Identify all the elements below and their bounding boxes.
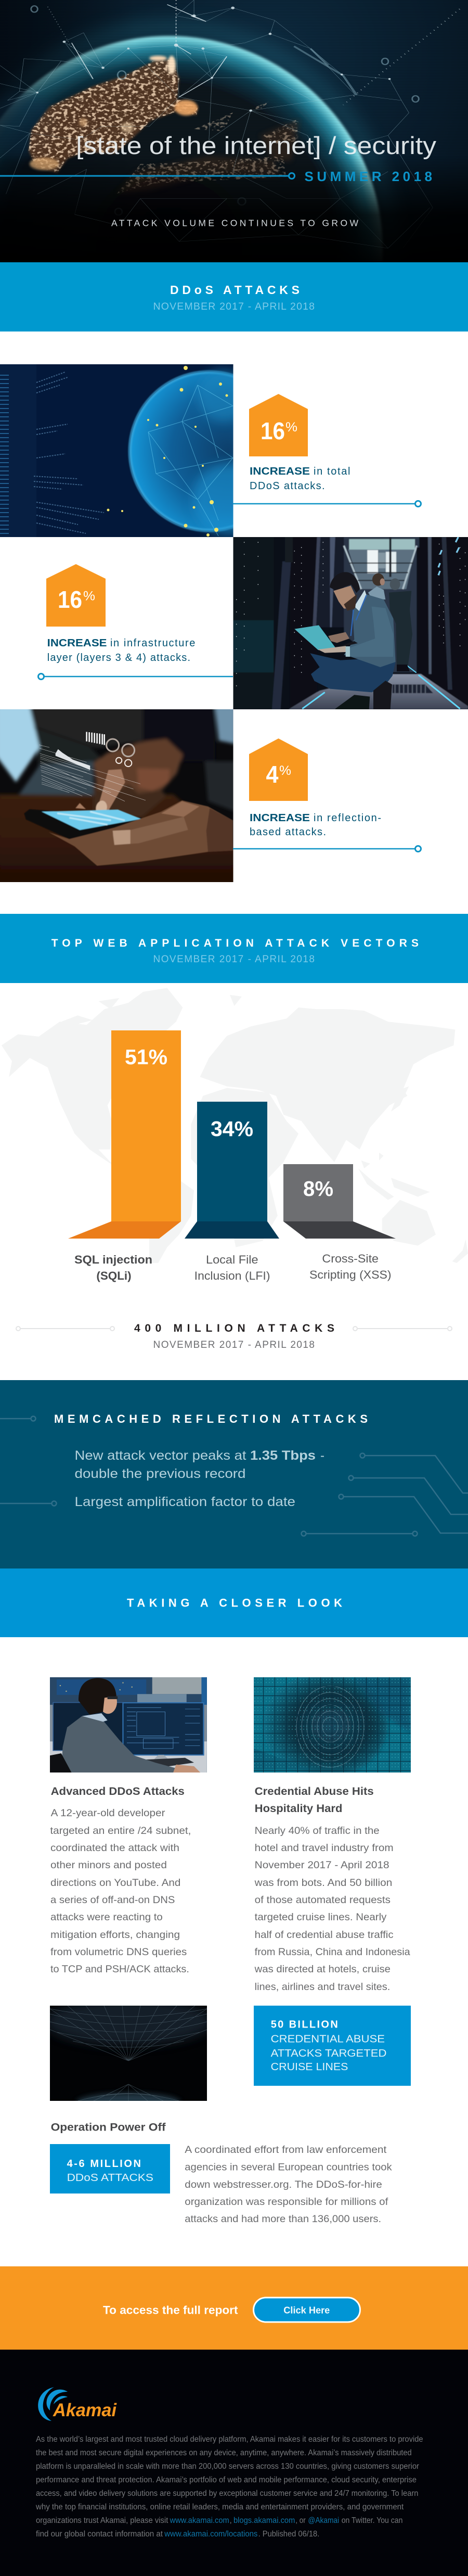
key points: 1.35 Tbps: [250, 1448, 316, 1463]
callout: 50 billion: [254, 2006, 411, 2086]
total figure: 400 MILLION ATTACKS: [134, 1322, 334, 1334]
callout: 4-6 million: [50, 2144, 170, 2194]
panel: memcached reflection attacks: [0, 1380, 468, 1568]
article body: targeted an entire /24 subnet,: [50, 1825, 191, 1837]
article heading: [255, 1786, 374, 1815]
article heading: Operation Power Off: [51, 2121, 166, 2134]
label: local file inclusion: [194, 1253, 270, 1282]
key points: Largest amplification factor to date: [75, 1495, 295, 1509]
key points: [75, 1448, 324, 1509]
call to action text: To access the full report: [103, 2304, 238, 2317]
label: SQL injection: SQL injection: [74, 1253, 152, 1266]
callout: 50 billion: ATTACKS TARGETED: [271, 2048, 386, 2059]
technician: [294, 572, 396, 709]
article body: lines, airlines and travel sites.: [255, 1981, 390, 1993]
background world map: [2, 988, 468, 1263]
article body: hotel and travel industry from: [255, 1842, 394, 1854]
bar chart: top attack vectors: [68, 1030, 396, 1282]
stat text: INCREASE: [47, 637, 107, 649]
company boilerplate text: access, and video delivery solutions are supported by exceptional customer service and 24/7 monitoring. To learn: [36, 2489, 418, 2498]
photo: dark perspective grid: [50, 2006, 207, 2101]
stat text: DDoS attacks.: [250, 480, 325, 492]
company boilerplate text: www.akamai.com: [170, 2516, 229, 2525]
logo: Akamai: [38, 2387, 117, 2421]
bar: SQL injection 51%: 51%: [125, 1045, 167, 1069]
panel heading: MEMCACHED REFLECTION ATTACKS: [54, 1412, 368, 1425]
section band: DDoS attacks: [0, 262, 468, 331]
orange stat badge: %: [279, 763, 291, 778]
photo: digital fingerprint: [254, 1673, 411, 1777]
orange stat badge: [46, 564, 106, 627]
company boilerplate text: . Published 06/18.: [258, 2530, 319, 2539]
label: local file inclusion: Inclusion (LFI): [194, 1269, 270, 1282]
article body: A 12-year-old developer: [51, 1807, 165, 1819]
article body: from Russia, China and Indonesia: [255, 1946, 410, 1958]
callout: 4-6 million: DDoS ATTACKS: [67, 2172, 153, 2184]
hero title: [state of the internet] / security: [76, 132, 437, 159]
company boilerplate text: on Twitter. You can: [342, 2516, 402, 2525]
timeline line with ring: [0, 173, 294, 179]
stat text: INCREASE: [250, 812, 310, 824]
continent lights: [29, 56, 299, 194]
callout: 4-6 million: 4-6 MILLION: [67, 2158, 141, 2170]
bar: cross-site scripting 8%: 8%: [303, 1177, 333, 1201]
photo: technician in server room: [233, 537, 468, 709]
company boilerplate text: platform is unparalleled in scale with more than 200,000 servers across 130 countries, giving customers superior: [36, 2462, 419, 2471]
stat text: in infrastructure: [110, 637, 195, 649]
stat panel: infrastructure layer attacks: [38, 564, 233, 680]
stat text: in reflection-: [314, 812, 381, 824]
company boilerplate text: organizations trust Akamai, please visit: [36, 2516, 168, 2525]
connector line: [38, 673, 233, 680]
article body: of those automated requests: [255, 1894, 391, 1906]
orange stat badge: %: [285, 420, 297, 435]
connector line: [233, 846, 421, 851]
article body: [185, 2144, 392, 2225]
stat text: in total: [314, 466, 350, 477]
article body: [50, 1807, 191, 1975]
article body: agencies in several European countries took: [185, 2162, 392, 2173]
article body: a series of off-and-on DNS: [50, 1894, 175, 1906]
company boilerplate text: find our global contact information at: [36, 2530, 163, 2539]
company boilerplate text: why the top financial institutions, online retail leaders, media and entertainment providers, and government: [35, 2503, 404, 2511]
bar: SQL injection 51%: [68, 1030, 181, 1239]
date range: NOVEMBER 2017 - APRIL 2018: [153, 301, 315, 312]
orange stat badge: [249, 738, 308, 801]
key points: -: [320, 1448, 324, 1463]
stat text: [47, 637, 195, 664]
bar: local file inclusion 34%: [185, 1102, 279, 1239]
connector line: [233, 501, 421, 507]
article body: directions on YouTube. And: [50, 1877, 180, 1889]
article body: attacks and had more than 136,000 users.: [185, 2213, 381, 2225]
article body: Nearly 40% of traffic in the: [255, 1825, 380, 1837]
article heading: Advanced DDoS Attacks: [51, 1786, 185, 1797]
article body: other minors and posted: [50, 1859, 167, 1871]
article: operation power off: [50, 2121, 392, 2225]
label: local file inclusion: Local File: [206, 1253, 258, 1266]
article body: [254, 1825, 410, 1993]
stat text: [250, 466, 350, 492]
network lines: [0, 0, 460, 248]
label: cross-site scripting: Cross-Site: [322, 1252, 379, 1265]
edition label: SUMMER 2018: [305, 169, 432, 184]
article body: was directed at hotels, cruise: [254, 1963, 391, 1975]
article body: targeted cruise lines. Nearly: [255, 1911, 387, 1923]
article: advanced DDoS attacks: [50, 1786, 191, 1975]
stat text: layer (layers 3 & 4) attacks.: [47, 652, 190, 664]
section heading: TAKING A CLOSER LOOK: [127, 1597, 342, 1609]
company boilerplate text: www.akamai.com/locations: [164, 2530, 258, 2539]
photo: hand using phone with holographic data: [0, 706, 236, 885]
section band: taking a closer look: [0, 1568, 468, 1637]
label: SQL injection: [74, 1253, 152, 1282]
company boilerplate text: , or: [295, 2516, 306, 2525]
section heading: DDoS ATTACKS: [170, 283, 300, 297]
hero banner: [0, 0, 468, 262]
callout: 50 billion: CRUISE LINES: [271, 2061, 348, 2073]
photo: analyst at monitors: [50, 1677, 207, 1773]
company boilerplate text: the best and most secure digital experiences on any device, anytime, anywhere. Akamai’s massively distributed: [36, 2449, 412, 2457]
article body: down webstresser.org. The DDoS-for-hire: [185, 2179, 382, 2190]
article body: attacks were reacting to: [50, 1911, 163, 1923]
article body: was from bots. And 50 billion: [254, 1877, 392, 1889]
stat text: INCREASE: [250, 466, 310, 477]
callout: 50 billion: 50 BILLION: [271, 2019, 338, 2031]
article body: organization was responsible for millions of: [185, 2196, 388, 2208]
bar: local file inclusion 34%: 34%: [211, 1117, 253, 1141]
background colleagues: [368, 573, 412, 671]
date range: NOVEMBER 2017 - APRIL 2018: [153, 1340, 315, 1350]
bar: cross-site scripting 8%: [283, 1164, 396, 1239]
date range: NOVEMBER 2017 - APRIL 2018: [153, 954, 315, 965]
stat panel: reflection-based attacks: [233, 738, 421, 851]
article body: coordinated the attack with: [50, 1842, 179, 1854]
section heading: TOP WEB APPLICATION ATTACK VECTORS: [51, 937, 419, 949]
call to action band: [0, 2266, 468, 2350]
hero image: glowing globe with network: [0, 0, 468, 262]
article body: half of credential abuse traffic: [255, 1929, 394, 1941]
button: click here: [254, 2298, 360, 2322]
article body: A coordinated effort from law enforcement: [185, 2144, 387, 2156]
key points: double the previous record: [75, 1466, 245, 1481]
key points: New attack vector peaks at: [75, 1448, 246, 1463]
article heading: Credential Abuse Hits: [255, 1786, 374, 1797]
article heading: Hospitality Hard: [255, 1803, 342, 1815]
company boilerplate text: performance and threat protection. Akamai’s portfolio of web and mobile performance, cloud security, enterprise: [36, 2476, 417, 2484]
company boilerplate text: ,: [230, 2516, 232, 2525]
callout: 50 billion: CREDENTIAL ABUSE: [271, 2034, 385, 2045]
company boilerplate text: @Akamai: [308, 2516, 339, 2525]
logo: Akamai: Akamai: [53, 2400, 117, 2420]
stat panel: total DDoS attacks: [233, 394, 421, 507]
company boilerplate text: As the world’s largest and most trusted cloud delivery platform, Akamai makes it easier for its customers to provide: [36, 2435, 423, 2444]
company boilerplate text: blogs.akamai.com: [233, 2516, 295, 2525]
article body: November 2017 - April 2018: [255, 1859, 389, 1871]
label: SQL injection: (SQLi): [96, 1269, 132, 1282]
label: cross-site scripting: Scripting (XSS): [309, 1268, 392, 1281]
footer: [0, 2350, 468, 2576]
orange stat badge: 16: [58, 586, 82, 613]
photo: data globe and code: [0, 364, 233, 537]
article body: to TCP and PSH/ACK attacks.: [50, 1963, 189, 1975]
article body: from volumetric DNS queries: [50, 1946, 187, 1958]
article body: mitigation efforts, changing: [50, 1929, 180, 1941]
total attacks callout: [16, 1322, 452, 1350]
hero tagline: ATTACK VOLUME CONTINUES TO GROW: [111, 218, 358, 228]
holographic data overlay: [39, 732, 146, 801]
section band: top web application attack vectors: [0, 914, 468, 983]
label: cross-site scripting: [309, 1252, 392, 1281]
orange stat badge: 4: [266, 761, 279, 788]
stat text: [250, 812, 381, 838]
button: click here: Click Here: [283, 2304, 330, 2316]
stat text: based attacks.: [250, 826, 326, 838]
company boilerplate text: [35, 2435, 423, 2539]
orange stat badge: 16: [261, 417, 285, 444]
orange stat badge: [249, 394, 308, 456]
orange stat badge: %: [83, 589, 95, 604]
article: credential abuse hits hospitality hard: [254, 1786, 410, 1993]
